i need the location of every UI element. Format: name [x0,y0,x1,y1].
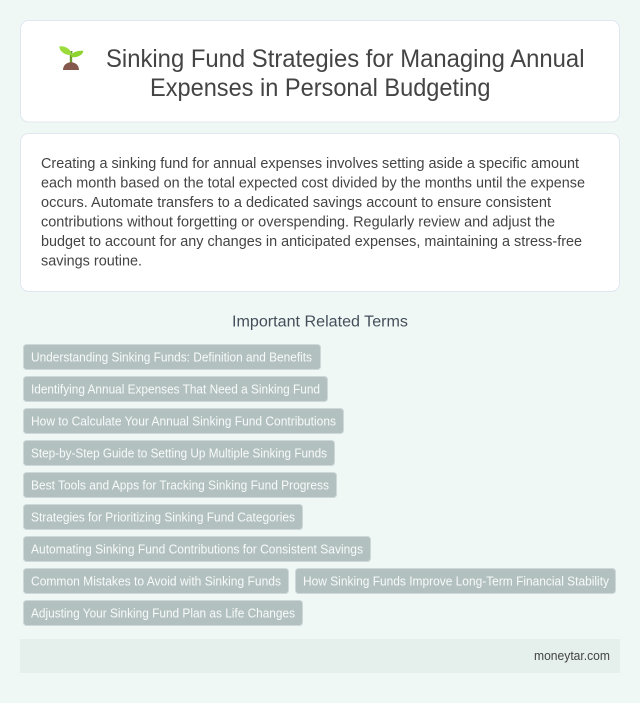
heading: Expenses in Personal Budgeting [150,74,490,102]
heading [106,45,584,102]
tags list [24,344,616,626]
tag [24,344,320,370]
tag: Step-by-Step Guide to Setting Up Multiple Sinking Funds [31,446,327,460]
text block: description: each month based on the total expected cost divided by the months until the expense [41,176,585,192]
tag [24,536,370,562]
text block: description: contributions without forgetting or overspending. Regularly review and adjust the [41,214,555,230]
tag: How Sinking Funds Improve Long-Term Financial Stability [303,574,610,588]
text block: description: occurs. Automate transfers to a dedicated savings account to ensure consistent [41,195,551,211]
tag: Best Tools and Apps for Tracking Sinking Fund Progress [31,478,329,492]
footer bar: moneytar.com [534,648,610,663]
tag [24,472,336,498]
icon: seedling [59,46,83,70]
tag [24,376,328,402]
tag: Automating Sinking Fund Contributions for Consistent Savings [31,542,363,556]
heading: important related terms: Important Related Terms [232,314,408,330]
heading: Sinking Fund Strategies for Managing Annual [106,45,584,73]
text block: description: budget to account for any changes in anticipated expenses, maintaining a stress-free [41,234,582,250]
tag [24,408,344,434]
panel: title card [20,20,620,122]
tag [24,568,288,594]
tag: Identifying Annual Expenses That Need a Sinking Fund [31,382,320,396]
tag [296,568,616,594]
tag: Strategies for Prioritizing Sinking Fund Categories [31,510,295,524]
tag: How to Calculate Your Annual Sinking Fund Contributions [31,414,336,428]
panel: description card [20,134,620,292]
tag [24,504,302,530]
tag [24,600,302,626]
tag: Common Mistakes to Avoid with Sinking Funds [31,574,281,588]
footer bar [20,639,620,673]
tag: Adjusting Your Sinking Fund Plan as Life Changes [31,606,295,620]
text block: description: Creating a sinking fund for annual expenses involves setting aside a specific amount [41,156,579,172]
tag: Understanding Sinking Funds: Definition and Benefits [31,350,312,364]
text block: description: savings routine. [41,254,142,270]
tag [24,440,334,466]
text block: description [41,156,585,270]
